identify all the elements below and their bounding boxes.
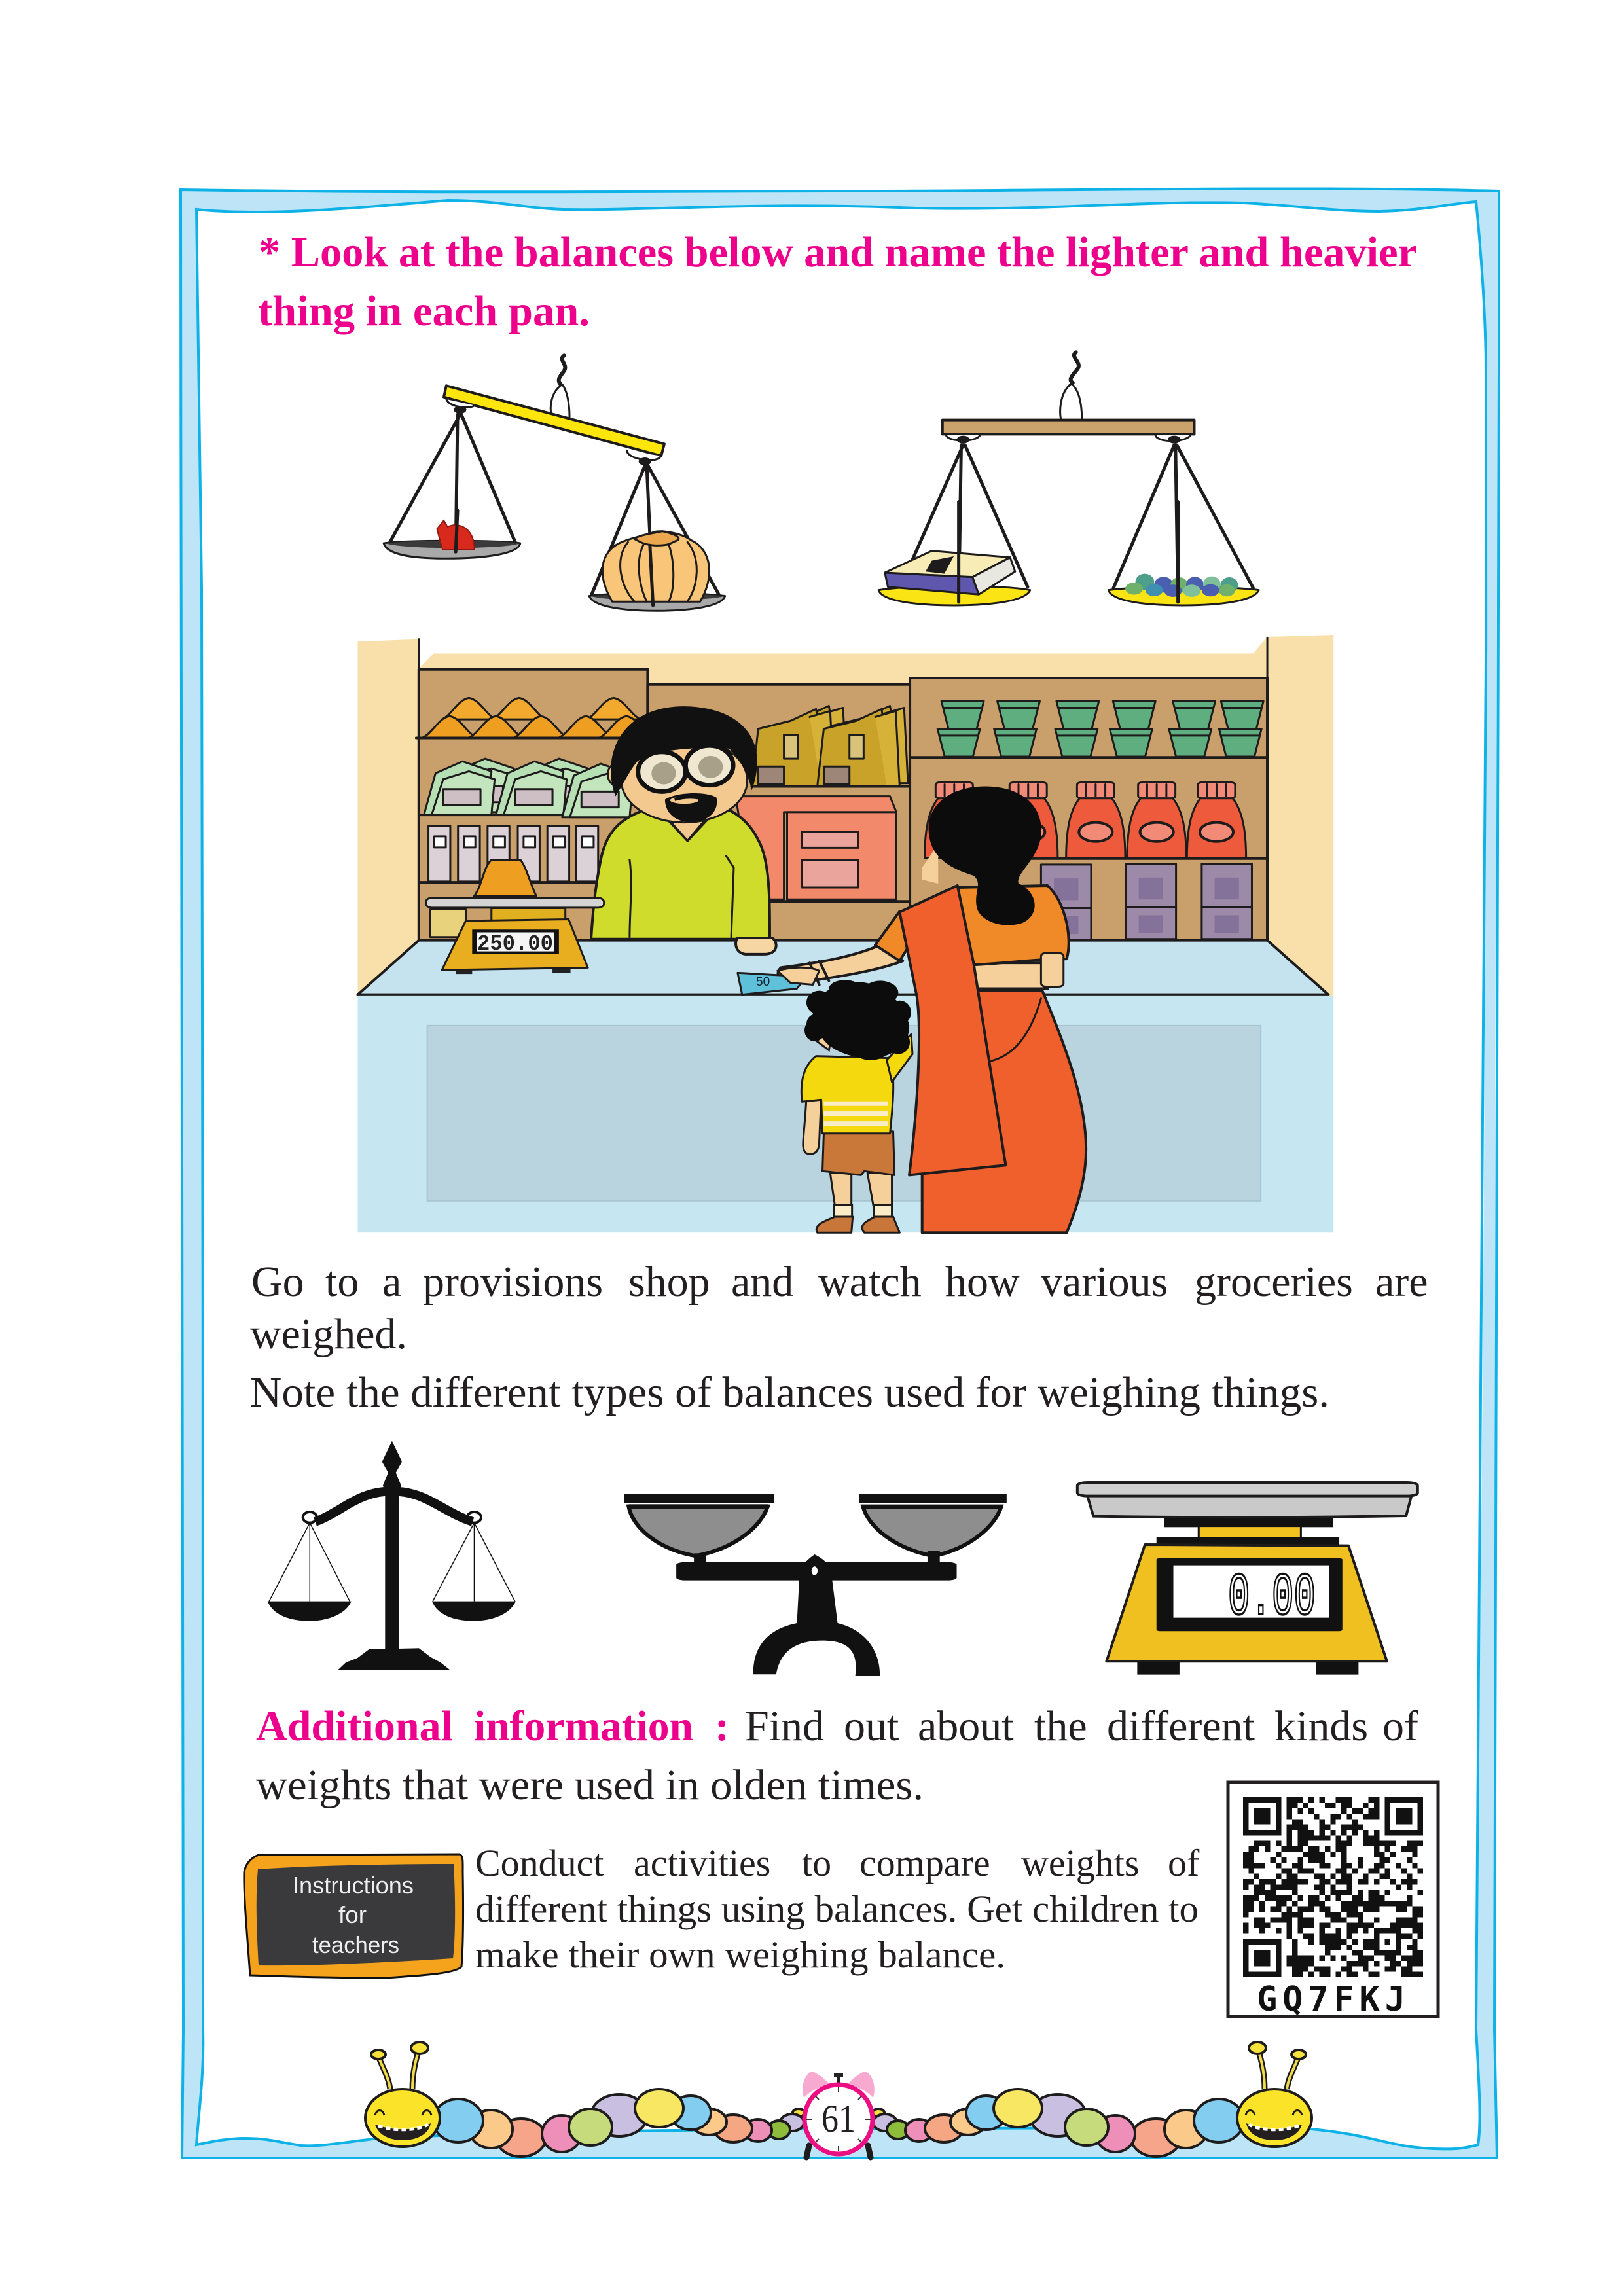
page number alarm clock: 61 bbox=[821, 2097, 856, 2140]
additional information: weights that were used in olden times. bbox=[256, 1761, 924, 1809]
body text bbox=[250, 1258, 1428, 1416]
teacher instructions text: Conduct bbox=[475, 1842, 604, 1884]
hook bbox=[559, 355, 565, 384]
right caterpillar bbox=[873, 2042, 1312, 2157]
additional information: out bbox=[844, 1702, 899, 1750]
additional information: of bbox=[1382, 1702, 1418, 1750]
body text: a bbox=[382, 1258, 401, 1306]
page border frame bbox=[181, 188, 1499, 2158]
title: * Look at the balances below and name the lighter and heavier bbox=[259, 228, 1417, 276]
teacher instructions text: weights bbox=[1021, 1842, 1139, 1884]
body text: weighed. bbox=[250, 1310, 407, 1358]
counter top bbox=[358, 941, 1328, 995]
additional information: about bbox=[918, 1702, 1014, 1750]
shop illustration bbox=[358, 635, 1333, 1232]
teacher instructions text: compare bbox=[859, 1842, 990, 1884]
teacher instructions text bbox=[475, 1842, 1200, 1976]
body text: groceries bbox=[1195, 1258, 1353, 1306]
scale reading: 0.00 bbox=[1228, 1564, 1316, 1632]
additional information: information bbox=[474, 1702, 693, 1750]
beam bbox=[943, 420, 1194, 434]
pale boxes bbox=[429, 826, 450, 882]
title: thing in each pan. bbox=[258, 287, 590, 335]
balance: book and marbles, level brown beam bbox=[878, 352, 1259, 605]
counter front bbox=[358, 996, 1333, 1232]
additional information: the bbox=[1034, 1702, 1087, 1750]
beam bbox=[444, 386, 664, 456]
body text: shop bbox=[628, 1258, 710, 1306]
left pan and book bbox=[901, 445, 1028, 602]
green packets bbox=[446, 759, 517, 812]
orange sweets bbox=[442, 698, 641, 719]
mother bbox=[778, 786, 1086, 1232]
additional information: Additional bbox=[256, 1702, 453, 1750]
QR code: GQ7FKJ bbox=[1257, 1980, 1405, 2019]
body text: watch bbox=[818, 1258, 922, 1306]
additional information: kinds bbox=[1274, 1702, 1368, 1750]
body text: how bbox=[945, 1258, 1020, 1306]
shopkeeper bbox=[591, 706, 776, 954]
hook bbox=[1071, 352, 1079, 383]
additional information: different bbox=[1107, 1702, 1255, 1750]
right pan and marbles bbox=[1113, 445, 1253, 602]
teacher instructions text: make their own weighing balance. bbox=[475, 1933, 1005, 1976]
scale display digits: 250.00 bbox=[477, 932, 553, 956]
banknote bbox=[738, 973, 806, 995]
additional information: Find bbox=[745, 1702, 824, 1750]
shop walls bbox=[358, 635, 1333, 997]
teacher instructions text: different things using balances. Get children to bbox=[475, 1888, 1199, 1930]
body text: to bbox=[325, 1258, 359, 1306]
balance type: two-bowl balance bbox=[624, 1494, 1007, 1676]
instructions for teachers board: teachers bbox=[312, 1931, 399, 1958]
body text: provisions bbox=[423, 1258, 603, 1306]
child bbox=[801, 980, 912, 1232]
instructions for teachers board bbox=[244, 1854, 463, 1978]
additional information: : bbox=[715, 1702, 729, 1750]
shelves bbox=[419, 670, 647, 940]
balance type: yellow digital scale bbox=[1077, 1482, 1418, 1675]
left pan and apple bbox=[390, 414, 515, 552]
balance: apple and pumpkin, tilted yellow beam bbox=[384, 355, 725, 611]
additional information bbox=[256, 1702, 1418, 1809]
yellow packets bbox=[765, 706, 847, 783]
banknote number: 50 bbox=[756, 975, 770, 989]
body text: Note the different types of balances used for weighing things. bbox=[250, 1369, 1329, 1416]
body text: various bbox=[1041, 1258, 1168, 1306]
teacher instructions text: activities bbox=[634, 1842, 770, 1884]
body text: are bbox=[1375, 1258, 1428, 1306]
purple boxes bbox=[1041, 865, 1091, 940]
teacher instructions text: to bbox=[802, 1842, 831, 1884]
page number alarm clock bbox=[803, 2072, 875, 2157]
red jars bbox=[925, 782, 984, 858]
right pan and pumpkin bbox=[592, 466, 719, 605]
instructions for teachers board: Instructions bbox=[293, 1872, 414, 1899]
kitchen scale on counter bbox=[426, 860, 604, 974]
green bowls bbox=[941, 701, 984, 729]
salmon boxes bbox=[736, 797, 896, 899]
title bbox=[258, 228, 1417, 335]
body text: and bbox=[731, 1258, 793, 1306]
body text: Go bbox=[251, 1258, 304, 1306]
balance type: hanging black balance bbox=[268, 1441, 516, 1670]
QR code bbox=[1228, 1782, 1438, 2019]
teacher instructions text: of bbox=[1168, 1842, 1200, 1884]
left caterpillar bbox=[365, 2042, 804, 2157]
instructions for teachers board: for bbox=[338, 1901, 367, 1928]
